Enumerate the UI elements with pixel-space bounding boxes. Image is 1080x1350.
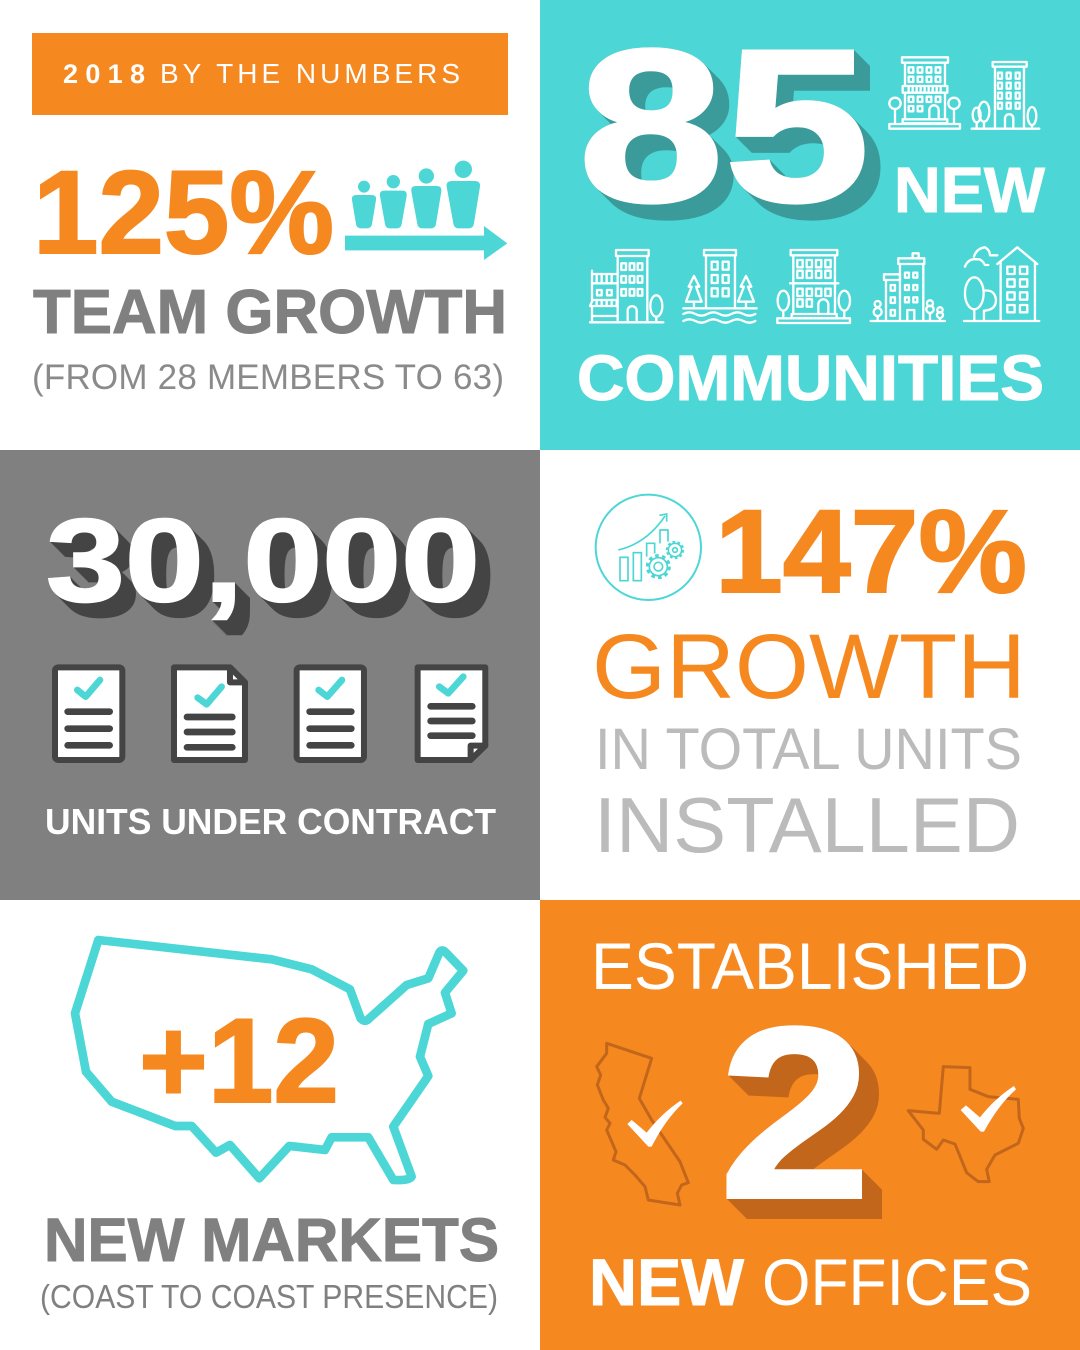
title banner — [32, 33, 508, 115]
stat: 30,000: 30,000 — [46, 495, 480, 627]
text: installed: INSTALLED — [594, 781, 1020, 869]
stat: 147%: 147% — [715, 486, 1027, 618]
stat: 2: 2 — [718, 976, 872, 1251]
title banner: 2018 — [63, 59, 145, 89]
heading: communities: COMMUNITIES — [577, 342, 1044, 414]
heading: new: NEW — [894, 154, 1046, 226]
caption: new offices — [589, 1245, 1032, 1319]
panel: new markets — [0, 900, 540, 1350]
icon: contract document 3 — [297, 667, 364, 760]
panel: team growth — [0, 0, 540, 450]
icon: contract document 4 — [418, 667, 485, 760]
icon: growing team with arrow — [345, 161, 507, 260]
panel: growth in units — [540, 450, 1080, 900]
icon: waterfront building with pines — [683, 250, 757, 323]
panel: units under contract — [0, 450, 540, 900]
heading: established: ESTABLISHED — [591, 929, 1029, 1003]
text: in total units: IN TOTAL UNITS — [595, 717, 1022, 782]
icon: apartment building with round trees — [889, 57, 960, 129]
stat: 85: 85 — [578, 5, 870, 248]
title banner: BY THE NUMBERS — [160, 58, 460, 89]
icon: california with check — [597, 1043, 688, 1205]
caption: coast to coast presence: (COAST TO COAST PRESENCE) — [40, 1278, 498, 1315]
stat: 125%: 125% — [33, 147, 334, 279]
caption: from 28 members to 63: (FROM 28 MEMBERS TO 63) — [32, 358, 504, 397]
icon: tower with trees — [972, 62, 1039, 129]
icon: chart and gears in circle — [596, 495, 701, 600]
heading: growth: GROWTH — [592, 616, 1026, 718]
icon: gabled house with trees and clouds — [964, 247, 1039, 321]
icon: storefront and tower — [590, 250, 663, 322]
heading: team growth: TEAM GROWTH — [33, 278, 507, 347]
icon: contract document 1 — [55, 667, 122, 760]
caption: new offices: OFFICES — [762, 1245, 1032, 1319]
caption: units under contract: UNITS UNDER CONTRACT — [45, 801, 496, 842]
icon: mid-rise with plinth and trees — [777, 250, 850, 323]
icon: texas with check — [908, 1067, 1023, 1182]
panel: new offices — [540, 900, 1080, 1350]
icon: contract document 2 — [174, 667, 245, 760]
icon: stepped towers with small trees — [871, 253, 945, 321]
stat: +12: +12 — [139, 994, 339, 1128]
map: united states outline — [75, 940, 463, 1180]
panel: new communities — [540, 0, 1080, 450]
heading: new markets: NEW MARKETS — [44, 1206, 499, 1274]
caption: new offices: NEW — [589, 1245, 745, 1319]
